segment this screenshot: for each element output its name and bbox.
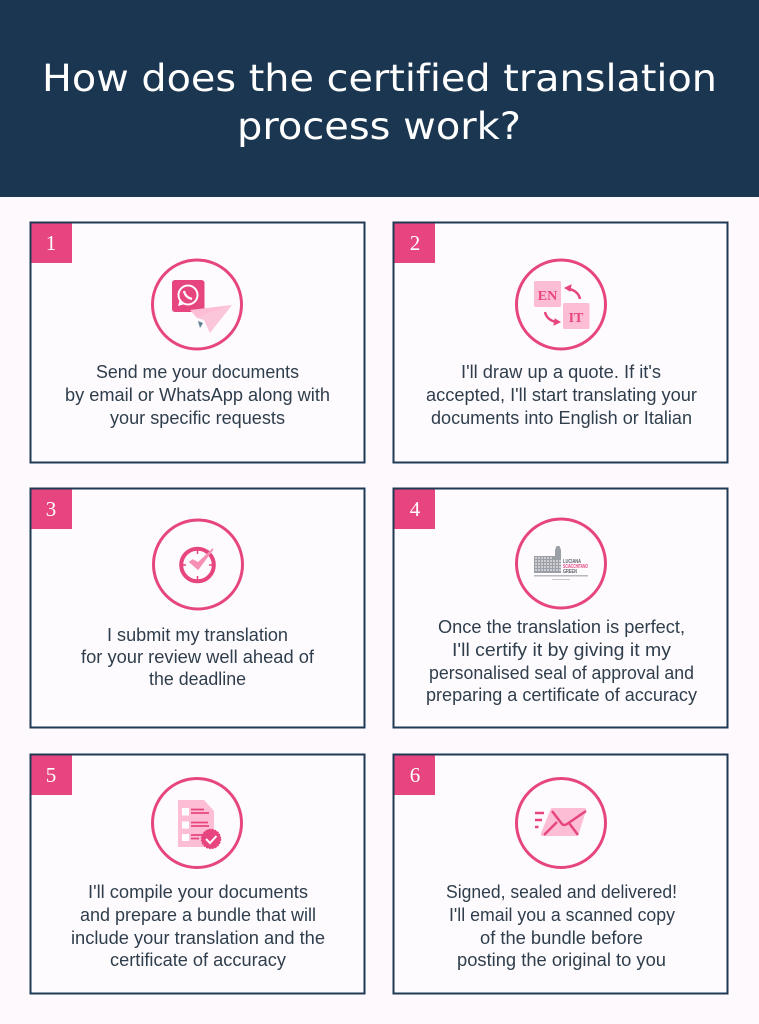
step number 2: 2 [410, 231, 420, 255]
step 3 text: for your review well ahead of [81, 647, 315, 667]
step 5 text: certificate of accuracy [110, 950, 286, 970]
step 4 text: preparing a certificate of accuracy [426, 685, 697, 705]
step number 1: 1 [46, 231, 56, 255]
step 5 text: and prepare a bundle that will [80, 905, 316, 925]
step 4 text: I'll certify it by giving it my [452, 640, 671, 660]
step number 3 [32, 490, 72, 529]
icon: WhatsApp and paper plane [152, 260, 242, 349]
step 3 text [81, 625, 315, 689]
step 6 text [446, 882, 677, 970]
title: process work? [237, 105, 521, 148]
step number 3: 3 [46, 497, 56, 521]
step 5 text: I'll compile your documents [88, 882, 308, 902]
step 6 text: of the bundle before [480, 928, 643, 948]
step number 4: 4 [410, 497, 421, 521]
step number 4 [394, 490, 435, 529]
step 6 text: posting the original to you [457, 950, 666, 970]
step 1 text: your specific requests [110, 408, 285, 428]
step number 6: 6 [410, 763, 420, 787]
icon: clock with check mark [154, 520, 242, 609]
panel: step 4 [394, 488, 728, 728]
step 2 text: I'll draw up a quote. If it's [461, 362, 661, 382]
icon: EN to IT language swap: IT [569, 311, 584, 326]
step 1 text: Send me your documents [96, 362, 299, 382]
step 3 text: the deadline [149, 669, 246, 689]
step number 1 [32, 224, 72, 263]
step number 2 [394, 224, 435, 263]
step 4 text: personalised seal of approval and [429, 663, 694, 683]
step 4 text: Once the translation is perfect, [438, 617, 685, 637]
step 4 text [426, 617, 697, 705]
step 3 text: I submit my translation [107, 625, 288, 645]
panel: step 3 [30, 488, 364, 728]
title [42, 57, 717, 148]
panel: step 1 [30, 222, 364, 462]
title: How does the certified translation [42, 57, 717, 100]
icon: EN to IT language swap [516, 260, 606, 349]
panel: step 2 [394, 222, 728, 462]
step number 5 [32, 756, 72, 795]
step 2 text: documents into English or Italian [431, 408, 692, 428]
icon: flying envelope [516, 778, 606, 868]
icon: personalised seal logo: LUCIANA [563, 559, 581, 565]
step 1 text: by email or WhatsApp along with [65, 385, 330, 405]
step 2 text: accepted, I'll start translating your [426, 385, 697, 405]
step 1 text [65, 362, 330, 428]
step 5 text: include your translation and the [71, 928, 325, 948]
icon: personalised seal logo [516, 519, 606, 608]
header banner [0, 0, 759, 197]
icon: document checklist with badge [152, 778, 242, 868]
step number 5: 5 [46, 763, 56, 787]
step 5 text [71, 882, 325, 970]
step number 6 [394, 756, 435, 795]
step 6 text: I'll email you a scanned copy [449, 905, 675, 925]
panel: step 5 [30, 754, 364, 994]
step 2 text [426, 362, 697, 428]
icon: EN to IT language swap: EN [538, 289, 557, 304]
step 6 text: Signed, sealed and delivered! [446, 882, 677, 902]
panel: step 6 [394, 754, 728, 994]
icon: personalised seal logo: GREEN [563, 569, 577, 575]
icon: personalised seal logo: SCIACCHITANO [563, 564, 588, 570]
